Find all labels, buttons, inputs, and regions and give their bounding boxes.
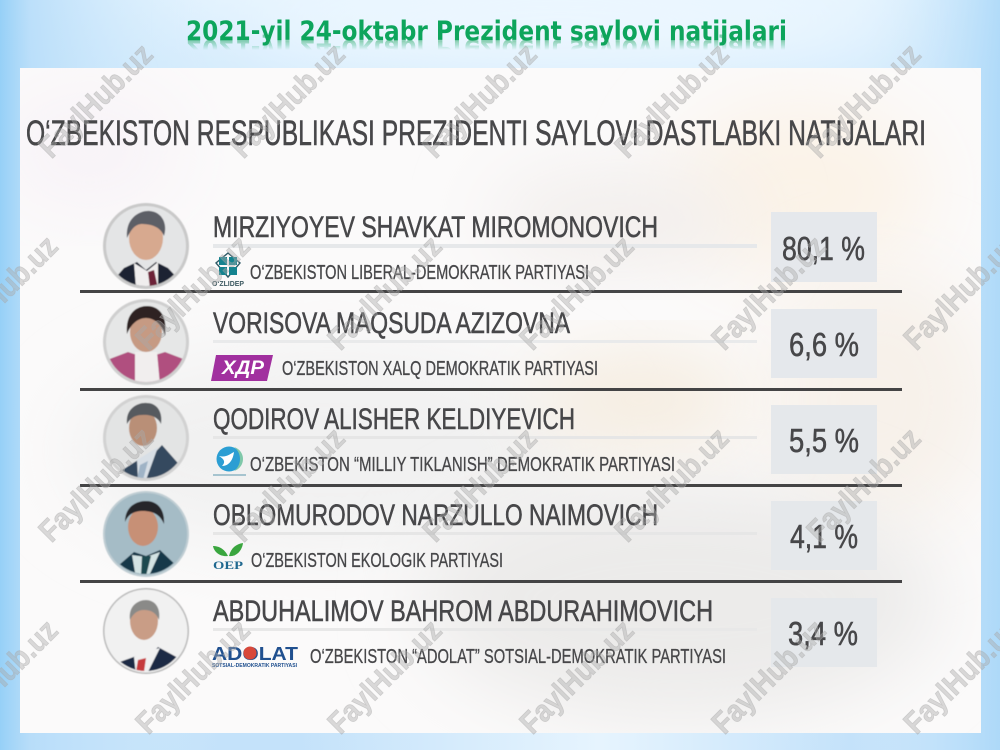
party logo: XDP: ХДР	[221, 358, 264, 379]
watermarks: FaylHub.uz	[129, 229, 257, 357]
party logo: OEP	[213, 543, 243, 572]
party name underline	[213, 532, 757, 535]
result box	[771, 405, 877, 474]
watermarks: FaylHub.uz	[800, 37, 928, 165]
title: 2021-yil 24-oktabr Prezident saylovi natijalari	[186, 33, 787, 64]
party name underline	[213, 628, 757, 631]
portrait: Oblomurodov	[103, 491, 189, 580]
candidate name: QODIROV ALISHER KELDIYEVICH	[213, 403, 575, 436]
result box	[771, 598, 877, 667]
party logo: Adolat: SOTSIAL-DEMOKRATIK PARTIYASI	[212, 663, 297, 669]
watermarks: FaylHub.uz	[416, 37, 544, 165]
result value: 4,1 %	[790, 518, 858, 555]
party name: O‘ZBEKISTON EKOLOGIK PARTIYASI	[251, 550, 503, 572]
watermarks: FaylHub.uz	[608, 421, 736, 549]
result box	[771, 309, 877, 378]
party name underline	[213, 340, 757, 343]
row 2: Vorisova	[103, 299, 877, 385]
portrait: Mirziyoyev	[103, 203, 189, 290]
party name: O‘ZBEKISTON XALQ DEMOKRATIK PARTIYASI	[282, 358, 598, 380]
candidate name: VORISOVA MAQSUDA AZIZOVNA	[213, 307, 570, 340]
result value: 3,4 %	[788, 615, 858, 652]
watermarks: FaylHub.uz	[224, 37, 352, 165]
portrait: Qodirov	[103, 395, 189, 485]
watermarks: FaylHub.uz	[32, 421, 160, 549]
party logo: OEP: OEP	[213, 558, 243, 572]
watermarks: FaylHub.uz	[321, 613, 449, 741]
divider rules	[80, 290, 902, 583]
party logo: Adolat: ADOLAT	[212, 644, 298, 664]
party logo: Adolat	[212, 644, 298, 669]
title: 2021-yil 24-oktabr Prezident saylovi natijalari	[186, 16, 787, 47]
portrait: Abduhalimov	[103, 588, 189, 680]
portrait: Vorisova	[103, 299, 189, 385]
row 5: Abduhalimov	[103, 588, 877, 680]
party logo: XDP	[211, 355, 273, 381]
watermarks: FaylHub.uz	[416, 421, 544, 549]
row 3: Qodirov	[103, 395, 877, 485]
result value: 6,6 %	[789, 326, 859, 363]
candidate name: MIRZIYOYEV SHAVKAT MIROMONOVICH	[213, 211, 658, 244]
watermarks: FaylHub.uz	[513, 229, 641, 357]
row 4: Oblomurodov	[103, 491, 877, 580]
result box	[771, 212, 877, 282]
party name underline	[213, 244, 757, 248]
watermarks: FaylHub.uz	[705, 229, 833, 357]
row 1: Mirziyoyev	[103, 203, 877, 290]
party name underline	[213, 436, 757, 439]
result value: 80,1 %	[782, 230, 865, 267]
watermarks: FaylHub.uz	[705, 613, 833, 741]
watermarks: FaylHub.uz	[224, 421, 352, 549]
party logo: Milliy Tiklanish	[213, 446, 246, 476]
watermarks: FaylHub.uz	[32, 37, 160, 165]
party name: O‘ZBEKISTON “MILLIY TIKLANISH” DEMOKRATIK PARTIYASI	[250, 454, 675, 476]
watermarks: FaylHub.uz	[800, 421, 928, 549]
watermarks: FaylHub.uz	[129, 613, 257, 741]
watermarks: FaylHub.uz	[321, 229, 449, 357]
candidate name: OBLOMURODOV NARZULLO NAIMOVICH	[213, 499, 658, 532]
result value: 5,5 %	[789, 422, 859, 459]
result box	[771, 501, 877, 570]
candidate name: ABDUHALIMOV BAHROM ABDURAHIMOVICH	[213, 595, 713, 628]
title	[186, 16, 787, 64]
party name: O‘ZBEKISTON LIBERAL-DEMOKRATIK PARTIYASI	[250, 262, 589, 284]
party logo: O'ZLIDEP	[212, 253, 244, 288]
party logo: O'ZLIDEP: O‘ZLIDEP	[212, 281, 244, 288]
watermarks: FaylHub.uz	[513, 613, 641, 741]
party name: O‘ZBEKISTON “ADOLAT” SOTSIAL-DEMOKRATIK PARTIYASI	[310, 646, 726, 668]
watermarks: FaylHub.uz	[608, 37, 736, 165]
